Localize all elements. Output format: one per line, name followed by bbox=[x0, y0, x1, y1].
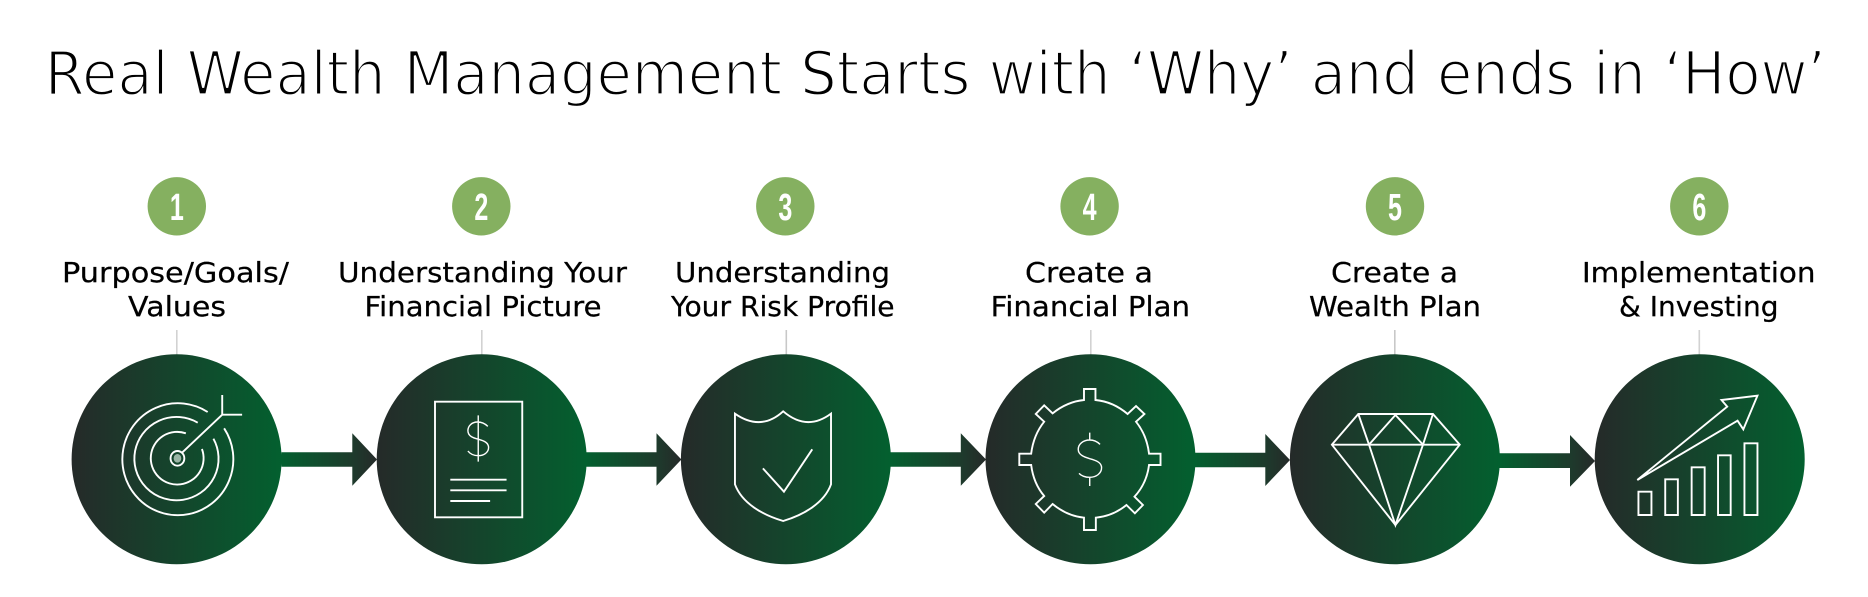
step 5 bbox=[1290, 177, 1500, 564]
label 2: Understanding Your bbox=[338, 256, 628, 289]
connector line 2 bbox=[481, 330, 483, 355]
label 2: Financial Picture bbox=[364, 290, 602, 323]
label 4 bbox=[991, 256, 1190, 323]
circle 5 bbox=[1290, 354, 1500, 564]
circle 4 bbox=[986, 354, 1196, 564]
number badge 2: 2 bbox=[474, 186, 488, 228]
label 6: Implementation bbox=[1582, 256, 1816, 289]
number badge 3: 3 bbox=[778, 186, 792, 228]
step 1 bbox=[62, 177, 290, 564]
number badge 2 bbox=[452, 177, 510, 236]
label 4: Create a bbox=[1025, 256, 1153, 289]
label 5 bbox=[1309, 256, 1481, 323]
label 5: Create a bbox=[1331, 256, 1458, 289]
arrow 5 bbox=[1500, 435, 1595, 487]
step 4 bbox=[986, 177, 1196, 564]
arrow 4 bbox=[1195, 434, 1290, 486]
number badge 1: 1 bbox=[170, 186, 184, 228]
label 6: & Investing bbox=[1619, 290, 1778, 323]
label 3: Your Risk Profile bbox=[670, 290, 895, 323]
connector line 4 bbox=[1090, 330, 1092, 355]
arrow 3 bbox=[890, 433, 986, 486]
step 2 bbox=[338, 177, 628, 564]
circle 1 bbox=[72, 354, 282, 564]
arrow 1 bbox=[282, 433, 377, 486]
number badge 4: 4 bbox=[1083, 186, 1097, 228]
icon: shield with check bbox=[735, 411, 831, 521]
number badge 3 bbox=[756, 177, 814, 236]
icon: financial document bbox=[435, 402, 522, 517]
icon: diamond bbox=[1332, 414, 1460, 525]
circle 2 bbox=[377, 354, 587, 564]
connector line 5 bbox=[1394, 330, 1396, 355]
connector line 3 bbox=[786, 330, 787, 355]
label 1: Values bbox=[128, 290, 226, 323]
label 4: Financial Plan bbox=[991, 290, 1190, 323]
icon: growth chart with arrow bbox=[1637, 396, 1757, 515]
label 3: Understanding bbox=[675, 256, 890, 289]
circle 3 bbox=[681, 354, 891, 564]
step 3 bbox=[670, 177, 895, 564]
icon: target with dart bbox=[122, 395, 242, 515]
step 6 bbox=[1582, 177, 1816, 564]
number badge 5 bbox=[1366, 177, 1424, 236]
number badge 4 bbox=[1060, 177, 1119, 236]
connector line 6 bbox=[1698, 330, 1700, 355]
arrow 2 bbox=[586, 433, 681, 486]
label 3 bbox=[670, 256, 895, 323]
circle 6 bbox=[1595, 354, 1805, 564]
label 2 bbox=[338, 256, 628, 323]
label 1 bbox=[62, 256, 290, 323]
number badge 1 bbox=[148, 177, 206, 236]
number badge 5: 5 bbox=[1388, 186, 1402, 228]
label 5: Wealth Plan bbox=[1309, 290, 1481, 323]
number badge 6: 6 bbox=[1692, 186, 1706, 228]
number badge 6 bbox=[1670, 177, 1729, 236]
icon: gear with dollar bbox=[1019, 389, 1161, 530]
label 6 bbox=[1582, 256, 1816, 323]
connector line 1 bbox=[176, 330, 178, 355]
label 1: Purpose/Goals/ bbox=[62, 256, 290, 289]
